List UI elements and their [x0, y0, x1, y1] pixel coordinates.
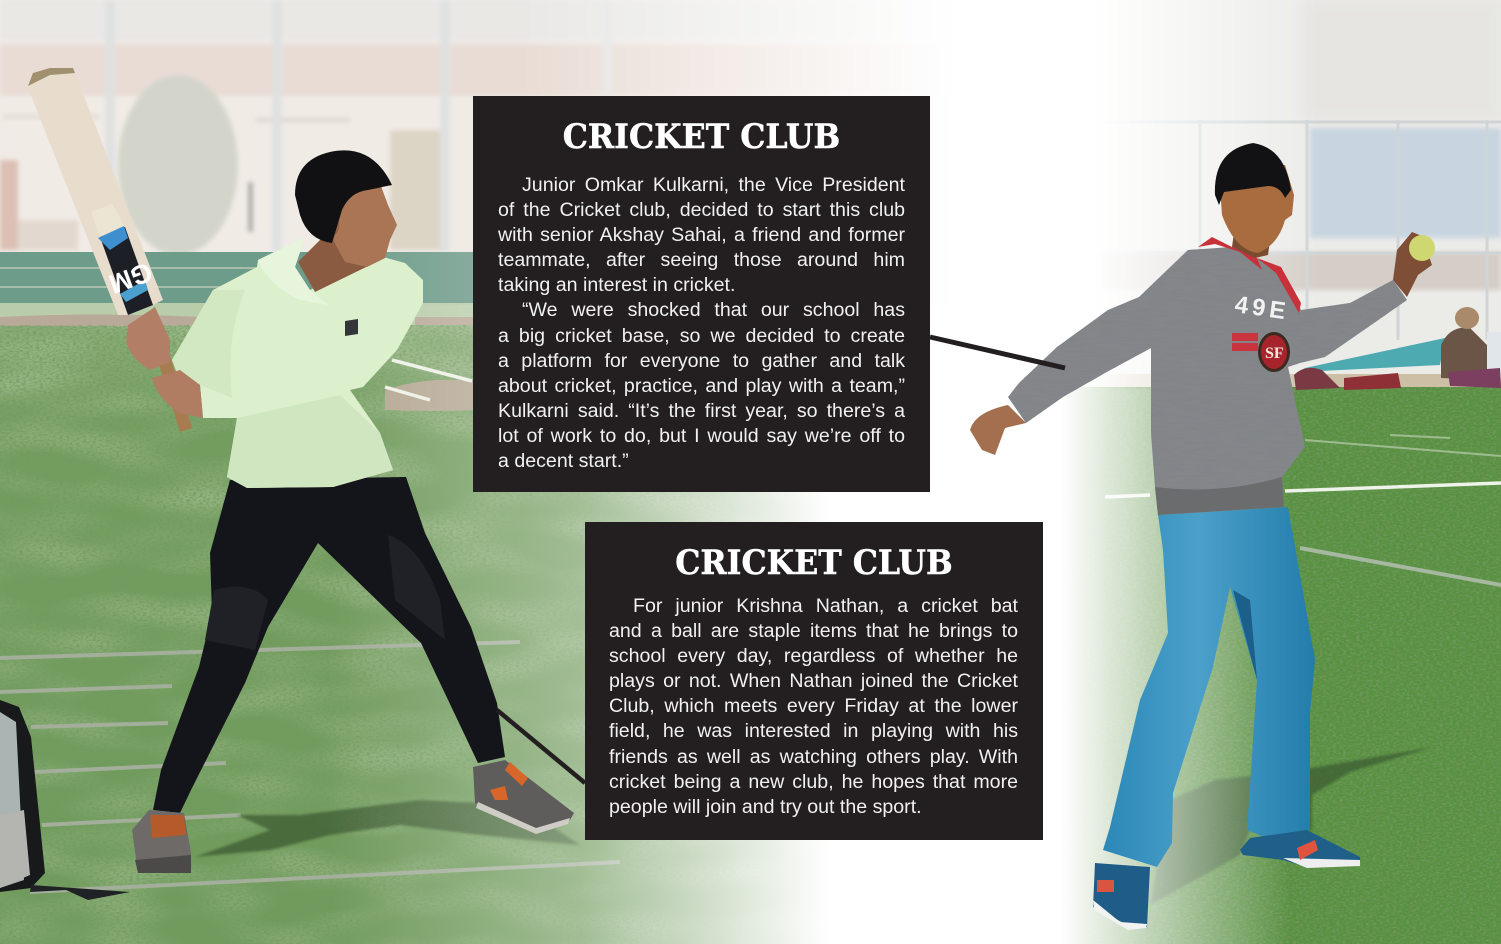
right player [970, 143, 1435, 930]
text block: a platform for everyone to gather and talk [498, 350, 905, 372]
backpack [0, 700, 130, 900]
bat [28, 68, 186, 430]
left player [0, 68, 574, 900]
hair [295, 150, 392, 243]
text block: Club, which meets every Friday at the lower [609, 695, 1018, 717]
text block: with senior Akshay Sahai, a friend and former [498, 224, 905, 246]
text block: school every day, regardless of whether he [609, 645, 1018, 667]
shoes [132, 760, 574, 873]
hoodie logo: 49E [1233, 291, 1291, 326]
text block [609, 595, 1018, 818]
text block: cricket being a new club, he hopes that more [609, 771, 1018, 793]
panel: Omkar Kulkarni story [473, 96, 930, 492]
heading: CRICKET CLUB [675, 543, 953, 583]
left background: school building and fence [0, 0, 872, 252]
hoodie [172, 237, 423, 488]
connector line: upper panel to right player [930, 337, 1065, 368]
spectators and bags [1294, 307, 1501, 390]
heading: CRICKET CLUB [563, 117, 840, 157]
hands [126, 307, 203, 418]
hoodie logo: SF [1265, 345, 1284, 362]
jeans [1103, 507, 1315, 867]
text block: people will join and try out the sport. [609, 796, 922, 818]
shoes [1093, 830, 1360, 930]
hoodie logo [1232, 291, 1291, 372]
text block: lot of work to do, but I would say we’re off to [498, 425, 905, 447]
neck and face [298, 178, 397, 292]
text block: For junior Krishna Nathan, a cricket bat [633, 595, 1018, 617]
text block: plays or not. When Nathan joined the Cricket [609, 670, 1018, 692]
text block: of the Cricket club, decided to start this club [498, 199, 905, 221]
text block: “We were shocked that our school has [522, 299, 905, 321]
red hood lining [1198, 237, 1301, 313]
hair [1215, 143, 1291, 205]
neck and face [1219, 165, 1294, 258]
text block: friends as well as watching others play. With [609, 746, 1018, 768]
text block: and a ball are staple items that he brings to [609, 620, 1018, 642]
text block: about cricket, practice, and play with a team,” [498, 375, 905, 397]
bat: GM [105, 256, 156, 299]
panel: Krishna Nathan story [585, 522, 1043, 840]
text block: Junior Omkar Kulkarni, the Vice President [522, 174, 905, 196]
text block: a decent start.” [498, 450, 629, 472]
hoodie [1008, 247, 1407, 515]
legs [153, 477, 505, 813]
text block: teammate, after seeing those around him [498, 249, 905, 271]
right background: fence, field and spectators [1112, 0, 1501, 388]
left field with dirt patches, lines and shadow [0, 252, 811, 944]
text block: a big cricket base, so we decided to create [498, 325, 905, 347]
text block: Kulkarni said. “It’s the first year, so there’s a [498, 400, 905, 422]
ball [1409, 235, 1435, 261]
hands [970, 232, 1432, 455]
text block: taking an interest in cricket. [498, 274, 735, 296]
connector line: lower panel to left player [497, 710, 585, 783]
text block: field, he was interested in playing with his [609, 720, 1018, 742]
text block [498, 174, 906, 472]
